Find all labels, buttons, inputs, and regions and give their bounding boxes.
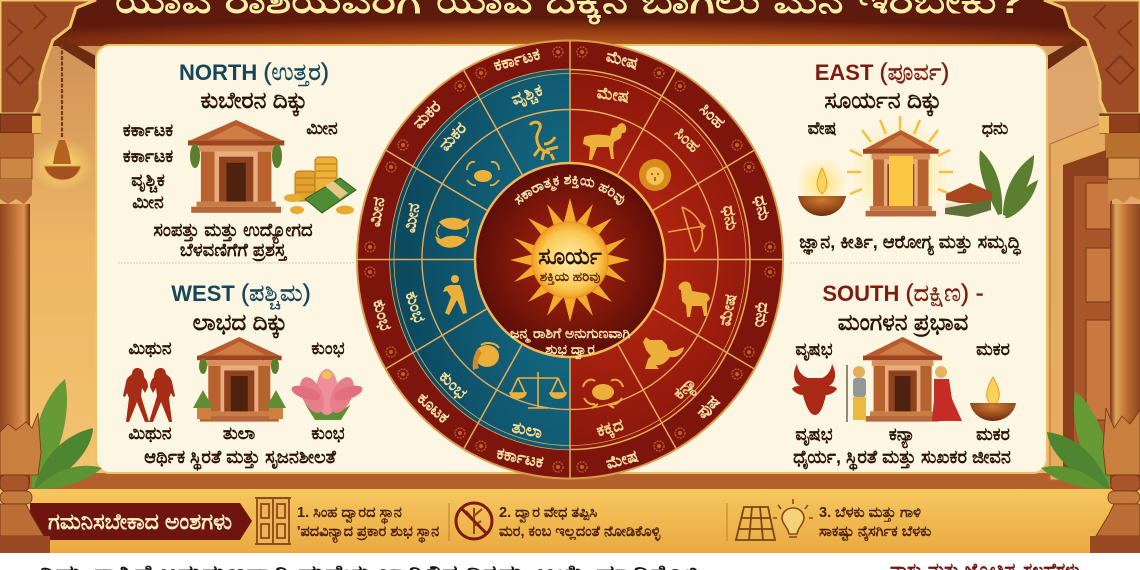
note 1 xyxy=(297,505,439,544)
rashi labels: south: ವೃಷಭ xyxy=(795,339,833,361)
icon: aquarius pot xyxy=(473,343,499,370)
outer rosettes xyxy=(365,47,775,472)
middle ring labels: ಮಕರ xyxy=(436,119,471,155)
note 1: 'ಪದವಿನ್ಯಾದ ಪ್ರಕಾರ ಶುಭ ಸ್ಥಾನ xyxy=(297,524,439,544)
outer ring labels: ಧನು xyxy=(751,301,773,330)
sun label: ಸೂರ್ಯ xyxy=(538,243,602,269)
icon: diya lamp east xyxy=(797,158,847,216)
middle ring labels: ಮೇಷ xyxy=(716,292,740,328)
rashi labels: north: ಕರ್ಕಾಟಕ xyxy=(123,120,173,140)
icon: north temple door xyxy=(188,120,284,213)
icon: lotus xyxy=(290,369,364,420)
rashi labels: west: ಮಿಥುನ xyxy=(128,423,172,443)
heading: north: NORTH (ಉತ್ತರ) xyxy=(179,59,329,86)
left pillar xyxy=(0,204,30,484)
outer ring labels xyxy=(366,45,774,473)
subheading: east: ಸೂರ್ಯನ ದಿಕ್ಕು xyxy=(824,87,942,117)
note 1: 1. ಸಿಂಹ ದ್ವಾರದ ಸ್ಥಾನ xyxy=(297,505,402,524)
lower centre text: ಜನ್ಮ ರಾಶಿಗೆ ಅನುಗುಣವಾಗಿ xyxy=(510,325,630,344)
right door xyxy=(1050,122,1112,480)
right arch and capital xyxy=(1044,0,1140,114)
centre disk: ಸಕಾರಾತ್ಮಕ ಶಕ್ತಿಯ ಹರಿವು xyxy=(514,174,624,206)
icon: sun xyxy=(510,198,630,322)
description: north: ಸಂಪತ್ತು ಮತ್ತು ಉದ್ಯೋಗದ xyxy=(153,220,313,244)
outer ring labels: ಕರ್ಕಾಟಕ xyxy=(492,45,543,75)
rashi labels: north: ಮೀನ xyxy=(132,192,164,212)
rashi labels: south: ಕನ್ಯಾ xyxy=(889,424,915,448)
middle ring labels: ಕುಂಭ xyxy=(402,289,429,325)
zodiac wheel xyxy=(356,40,784,480)
icon: light bulb xyxy=(773,499,813,537)
icon: diya lamp south xyxy=(970,377,1016,421)
rashi labels: south: ಮಕರ xyxy=(976,339,1011,359)
rashi labels: west xyxy=(128,338,345,443)
description: east: ಜ್ಞಾನ, ಕೀರ್ತಿ, ಆರೋಗ್ಯ ಮತ್ತು ಸಮೃದ್ಧಿ xyxy=(799,232,1021,256)
icon: crab upper xyxy=(467,162,499,185)
right pillar capital and base xyxy=(1090,408,1140,553)
icon: pisces fish xyxy=(435,218,470,248)
right pillar xyxy=(1099,114,1140,484)
white footer strip xyxy=(0,553,1140,570)
rashi labels: east xyxy=(808,118,1009,138)
icon: bull head xyxy=(792,364,837,415)
icon: aquarius figure xyxy=(443,275,467,315)
middle ring labels: ಕುಂಭ xyxy=(436,368,471,403)
icon: coins and cash xyxy=(284,157,356,214)
middle ring labels: ಧನು xyxy=(719,204,741,232)
middle ring labels: ಸಿಂಹ xyxy=(671,124,703,156)
middle ring labels: ವೃಶ್ಚಿಕ xyxy=(509,81,546,112)
middle ring labels: ಮೇಷ xyxy=(596,84,631,106)
note 3 xyxy=(819,505,932,542)
sun label xyxy=(538,243,602,286)
outer ring labels: ಕುಂಭ xyxy=(369,298,395,333)
note 3: 3. ಬೆಳಕು ಮತ್ತು ಗಾಳಿ xyxy=(819,505,921,522)
rashi labels: south: ಮಕರ xyxy=(976,424,1011,444)
icon: west temple door xyxy=(193,337,286,422)
middle ring labels: ಕಕ್ಕದ xyxy=(595,416,626,442)
rashi labels: west: ತುಲಾ xyxy=(223,423,255,443)
middle ring labels: ಮೀನ xyxy=(401,201,424,234)
outer ring labels: ಮೇಷ xyxy=(604,447,641,473)
rashi labels: south: ವೃಷಭ xyxy=(795,424,833,446)
subheading: south: ಮಂಗಳನ ಪ್ರಭಾವ xyxy=(838,309,968,338)
outer ring labels: ಮೀನ xyxy=(366,195,389,228)
note 2 xyxy=(499,505,661,542)
heading: south: SOUTH (ದಕ್ಷಿಣ) - xyxy=(822,280,984,307)
rashi labels: east: ಧನು xyxy=(982,118,1009,138)
icon: capricorn xyxy=(643,337,684,369)
rashi labels: east: ವೇಷ xyxy=(808,118,837,138)
main cream panel xyxy=(96,45,1047,473)
middle ring labels: ಕನ್ಯಾ xyxy=(670,373,703,406)
rashi labels: south xyxy=(795,339,1011,448)
panel: west xyxy=(123,280,364,471)
wheel rings xyxy=(357,40,783,478)
outer ring labels: ಸಿಂಹ xyxy=(696,100,728,132)
note 2: ಮರ, ಕಂಬ ಇಲ್ಲದಂತೆ ನೋಡಿಕೊಳ್ಳಿ xyxy=(499,524,661,542)
outer ring labels: ಮಕರ xyxy=(409,97,445,133)
zodiac icons xyxy=(435,122,710,408)
icon: double door xyxy=(255,498,291,544)
sun label: ಶಕ್ತಿಯ ಹರಿವು xyxy=(540,269,601,286)
panel: north xyxy=(123,59,356,262)
lower centre text: ಶುಭ ದ್ವಾರ xyxy=(545,341,595,360)
outer ring labels: ಮೇಷ xyxy=(604,47,641,73)
rashi labels: west: ಕುಂಭ xyxy=(311,338,345,358)
description: north: ಬೆಳವಣಿಗೆಗೆ ಪ್ರಶಸ್ತ xyxy=(180,240,288,262)
icon: gemini twins xyxy=(123,368,175,422)
description: south: ಧೈರ್ಯ, ಸ್ಥಿರತೆ ಮತ್ತು ಸುಖಕರ ಜೀವನ xyxy=(793,447,1011,471)
icon: prohibited tree xyxy=(456,503,492,539)
description: north xyxy=(153,220,313,262)
outer ring labels: ಪುಷ xyxy=(693,391,724,422)
panel: south xyxy=(792,280,1016,471)
outer ring labels: ಕರ್ಕಾಟಕ xyxy=(495,444,546,472)
rashi labels: west: ಕುಂಭ xyxy=(311,423,345,443)
outer ring labels: ಕೂಟಕ xyxy=(414,389,453,427)
plant: left xyxy=(31,379,102,489)
note 2: 2. ದ್ವಾರ ವೇಧ ತಪ್ಪಿಸಿ xyxy=(499,505,597,524)
icon: east temple with sun glow xyxy=(847,116,953,222)
icon: libra scales xyxy=(510,372,566,408)
middle ring labels xyxy=(401,81,741,442)
icon: books xyxy=(945,183,992,217)
rashi labels: north xyxy=(123,118,338,212)
lower centre text xyxy=(510,325,630,360)
bottom strip: points to note xyxy=(0,489,1140,553)
heading: west: WEST (ಪಶ್ಚಿಮ) xyxy=(171,280,311,309)
subheading: north: ಕುಬೇರನ ದಿಕ್ಕು xyxy=(201,87,307,117)
rashi labels: north: ಮೀನ xyxy=(306,118,338,138)
rashi labels: west: ಮಿಥುನ xyxy=(128,338,172,358)
icon: ram xyxy=(679,282,710,317)
icon: palm leaves xyxy=(979,150,1038,218)
icon: leo lion xyxy=(639,159,671,191)
icon: shiva figure xyxy=(847,365,866,422)
rashi labels: north: ವೃಶ್ಚಿಕ xyxy=(131,170,165,193)
heading: east: EAST (ಪೂರ್ವ) xyxy=(815,59,949,86)
subheading: west: ಲಾಭದ ದಿಕ್ಕು xyxy=(193,309,287,339)
description: west: ಆರ್ಥಿಕ ಸ್ಥಿರತೆ ಮತ್ತು ಸೃಜನಶೀಲತೆ xyxy=(144,447,337,471)
icon: sagittarius bow xyxy=(668,207,705,252)
left pillar capital and base xyxy=(0,413,50,553)
icon: goddess figure xyxy=(932,366,962,421)
icon: crab lower xyxy=(583,380,623,408)
icon: aries ram xyxy=(583,123,626,160)
middle ring labels: ತುಲಾ xyxy=(510,418,544,442)
centre disk xyxy=(474,162,666,360)
outer ring labels: ಧನು xyxy=(751,194,774,223)
note 3: ಸಾಕಷ್ಟು ನೈಸರ್ಗಿಕ ಬೆಳಕು xyxy=(819,524,932,542)
left arch and capital xyxy=(0,0,96,204)
rashi labels: north: ಕರ್ಕಾಟಕ xyxy=(123,146,173,166)
icon: scorpio xyxy=(530,122,558,160)
icon: south temple door xyxy=(863,337,942,422)
icon: skylight grid xyxy=(736,507,775,540)
panel: east xyxy=(797,59,1038,256)
label arrow: ಗಮನಿಸಬೇಕಾದ ಅಂಶಗಳು xyxy=(48,509,232,534)
label arrow xyxy=(30,503,252,540)
icon: hanging oil lamp xyxy=(30,45,94,191)
title band xyxy=(0,0,1140,70)
plant: right xyxy=(1041,391,1110,489)
